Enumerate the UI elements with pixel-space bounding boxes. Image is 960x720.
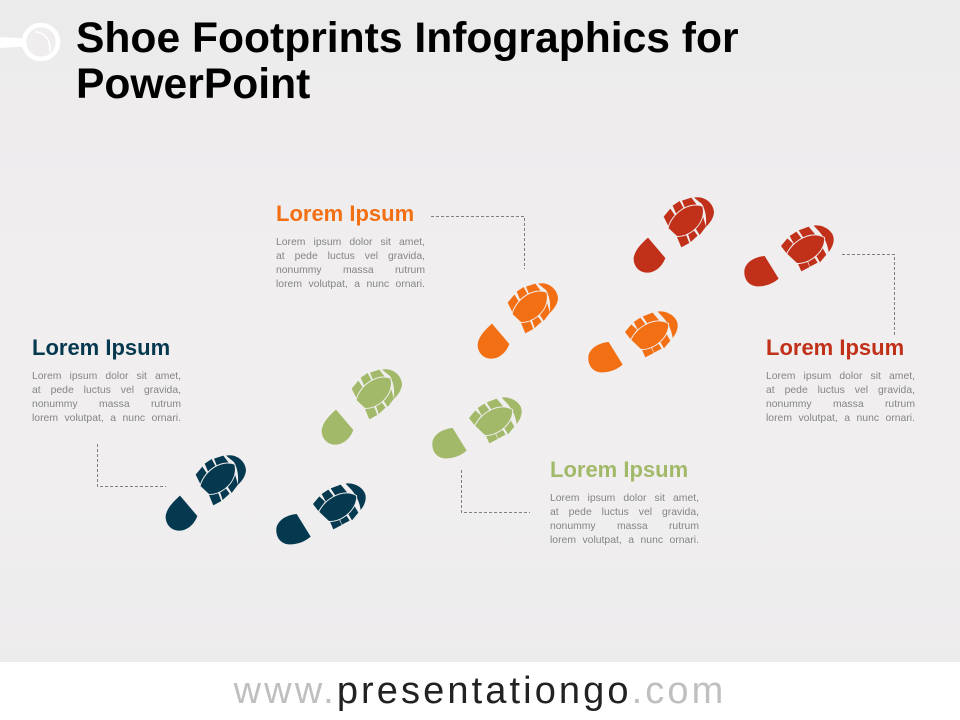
text block: red [766,335,915,424]
text block: navy: lorem volutpat, a nunc ornari. [32,413,181,424]
footprint pair: red [634,197,834,286]
connector: navy [98,444,166,486]
text block: green: Lorem Ipsum [550,457,688,482]
connector: red [842,254,894,336]
title: PowerPoint [76,60,310,108]
footprint pair: navy [166,455,366,544]
text block: red: Lorem ipsum dolor sit amet, [766,370,915,382]
footer: website address [0,662,960,720]
connector: green [462,470,530,512]
text block: red: lorem volutpat, a nunc ornari. [766,413,915,424]
text block: red: Lorem Ipsum [766,335,904,360]
footer: website address: www.presentationgo.com [234,670,726,712]
icon: white ring with tail [0,22,60,62]
title: Shoe Footprints Infographics for [76,14,739,62]
text block: green: nonummy massa rutrum [550,521,699,532]
text block: orange: nonummy massa rutrum [276,265,425,276]
text block: green [550,457,699,546]
text block: orange: at pede luctus vel gravida, [276,251,425,262]
text block: red: nonummy massa rutrum [766,399,915,410]
text block: red: at pede luctus vel gravida, [766,385,915,396]
text block: orange: Lorem Ipsum [276,201,414,226]
text block: orange [276,201,425,290]
text block: navy [32,335,181,424]
text block: navy: Lorem Ipsum [32,335,170,360]
connector: orange [431,216,524,269]
title [76,14,739,108]
text block: navy: nonummy massa rutrum [32,399,181,410]
text block: green: lorem volutpat, a nunc ornari. [550,535,699,546]
footprint pair: orange [478,283,678,372]
text block: orange: Lorem ipsum dolor sit amet, [276,236,425,248]
text block: navy: at pede luctus vel gravida, [32,385,181,396]
text block: green: at pede luctus vel gravida, [550,507,699,518]
footprint pair: green [322,369,522,458]
text block: navy: Lorem ipsum dolor sit amet, [32,370,181,382]
text block: green: Lorem ipsum dolor sit amet, [550,492,699,504]
text block: orange: lorem volutpat, a nunc ornari. [276,279,425,290]
